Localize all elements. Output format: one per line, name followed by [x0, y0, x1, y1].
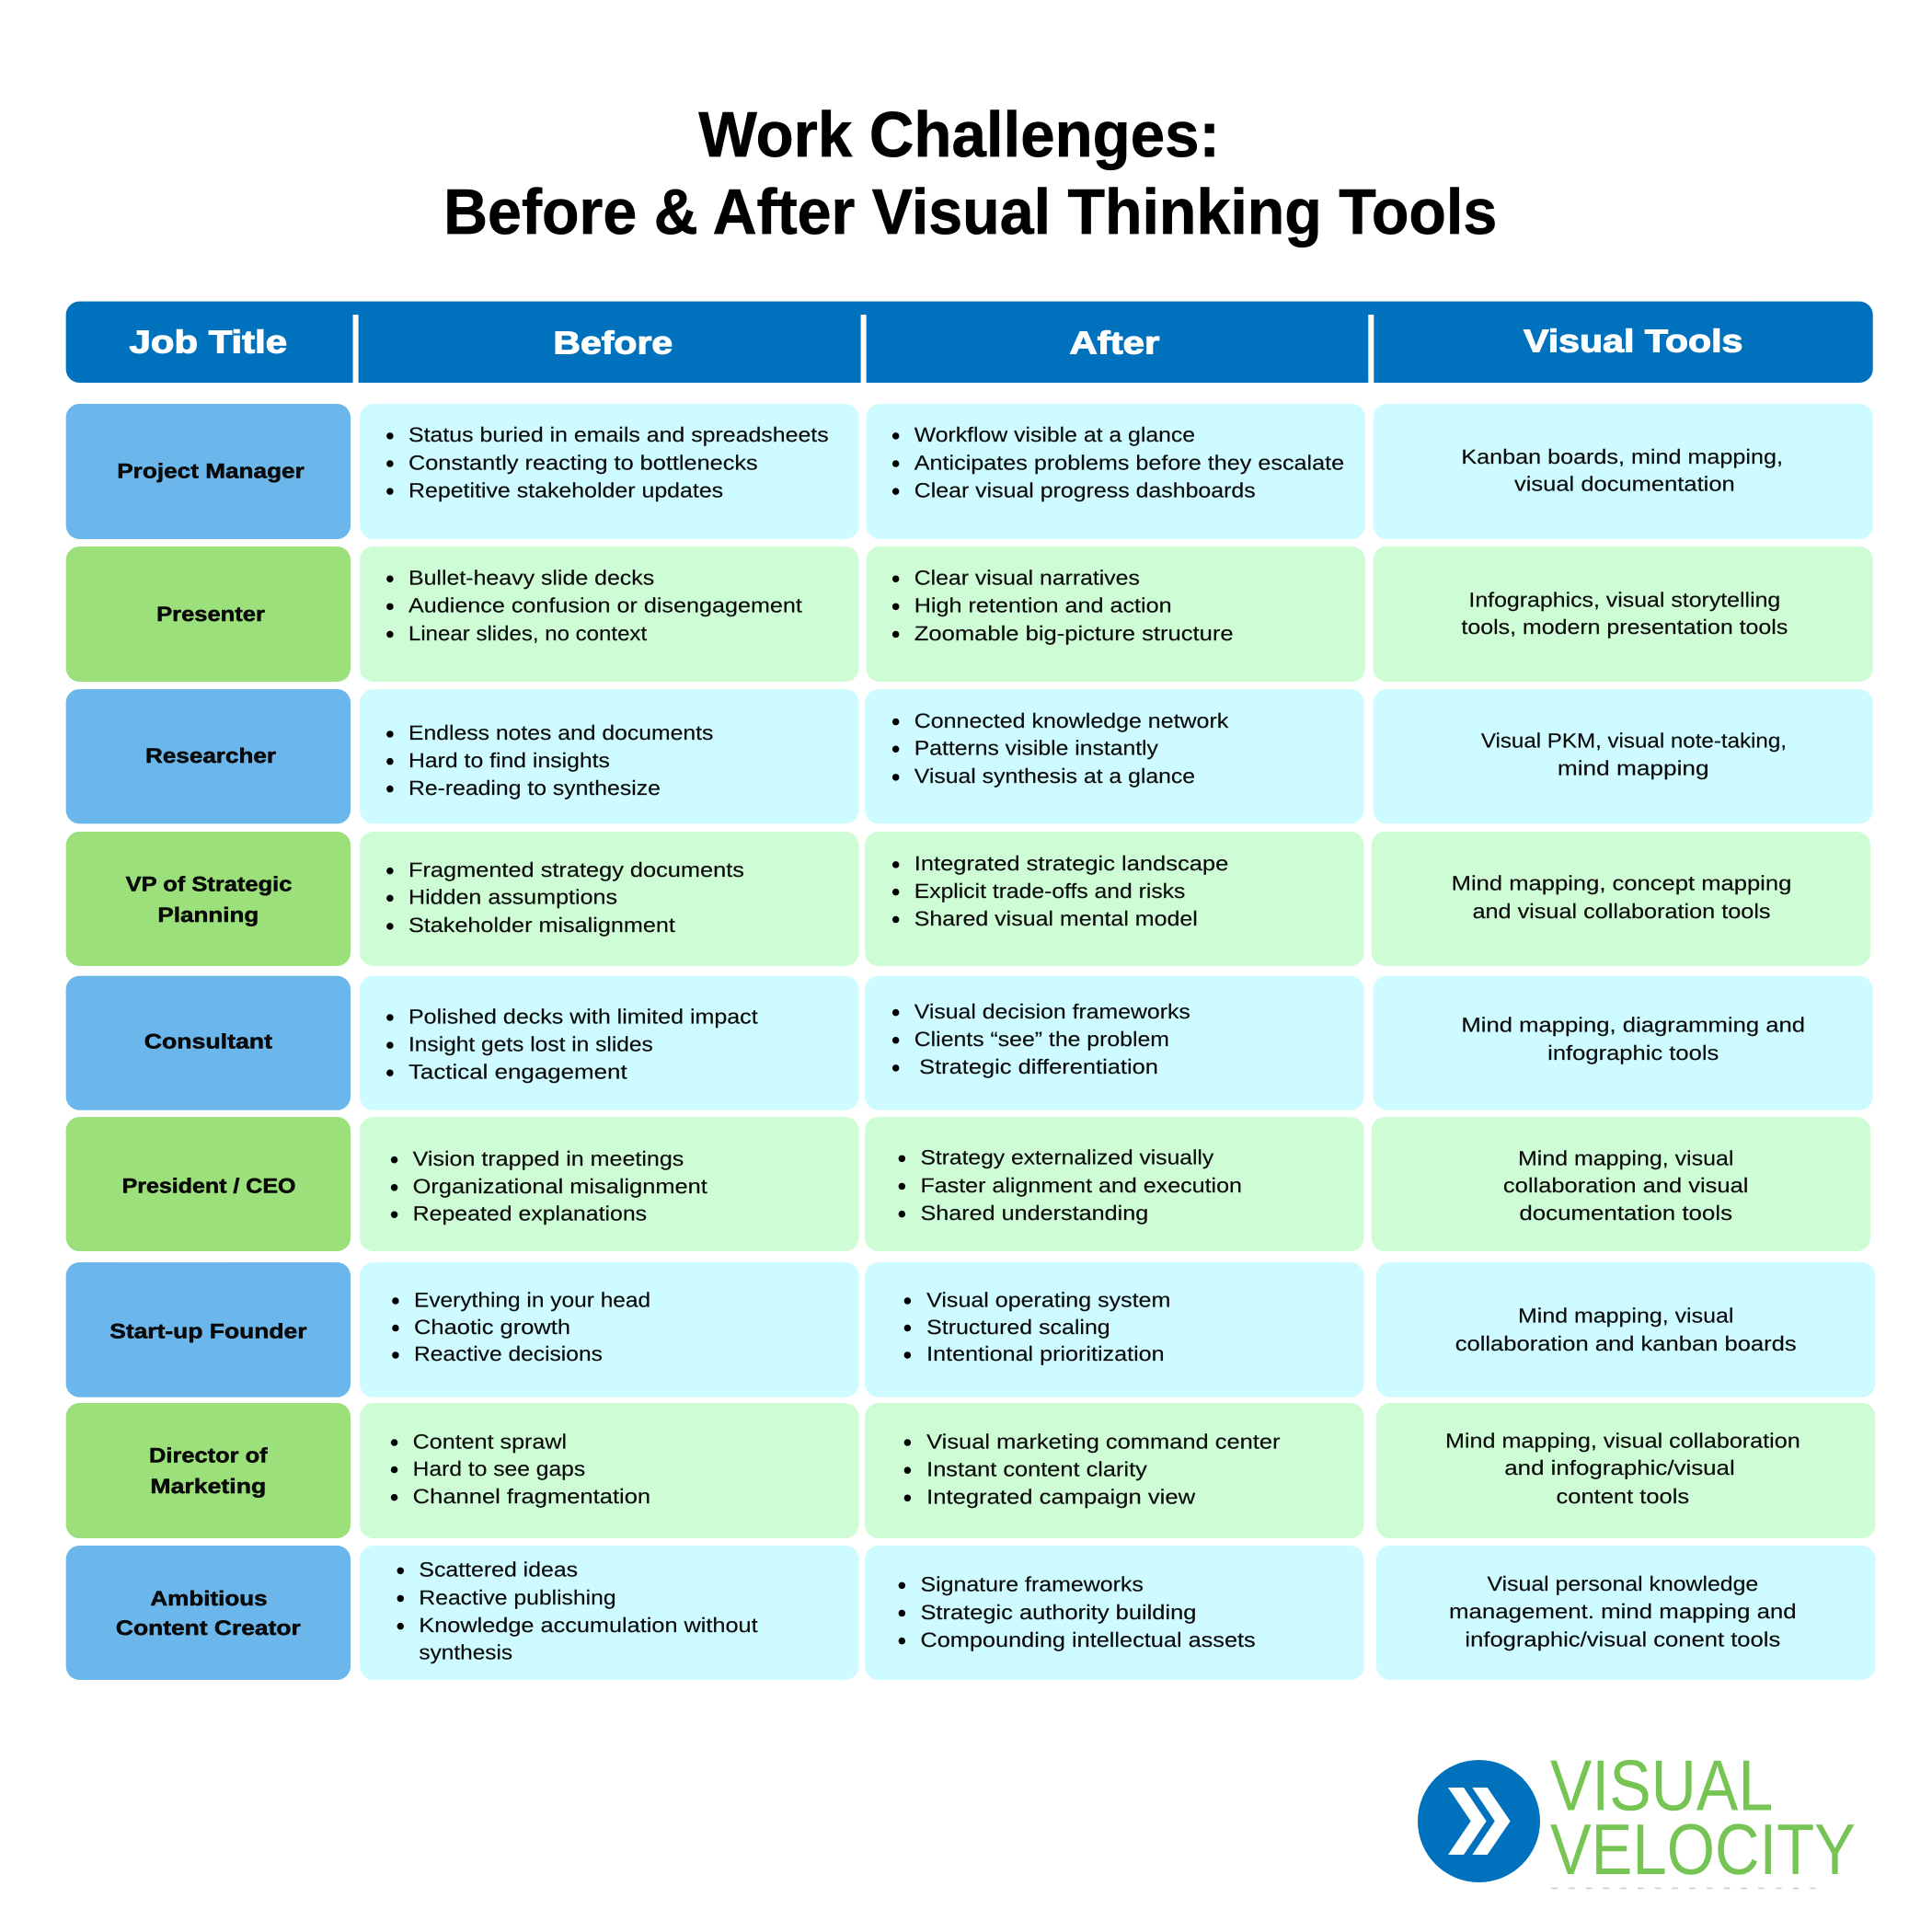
- after: Start-up Founder: Structured scaling: [926, 1316, 1110, 1339]
- tools: Researcher: [1374, 689, 1873, 823]
- after: Ambitious Content Creator: Strategic authority building: [920, 1601, 1196, 1624]
- job title: Consultant: Consultant: [144, 1030, 273, 1053]
- row: Ambitious Content Creator: [66, 1546, 1875, 1680]
- after: Presenter: High retention and action: [914, 594, 1172, 617]
- logo: Visual Velocity: [1418, 1746, 1856, 1890]
- row: Presenter: [66, 546, 1873, 682]
- title: Work Challenges:: [698, 99, 1220, 171]
- after: Presenter: [867, 546, 1365, 682]
- job title: Project Manager: [66, 404, 351, 539]
- tools: Consultant: infographic tools: [1547, 1041, 1719, 1064]
- table header: Visual Tools: [1524, 322, 1742, 359]
- logo wordmark: VELOCITY: [1550, 1810, 1856, 1890]
- before: Ambitious Content Creator: Scattered ideas: [419, 1558, 578, 1581]
- tools: President / CEO: documentation tools: [1519, 1202, 1732, 1225]
- tools: President / CEO: collaboration and visual: [1503, 1174, 1748, 1197]
- tools: VP of Strategic Planning: and visual collaboration tools: [1472, 900, 1771, 923]
- job title: Project Manager: Project Manager: [117, 460, 305, 483]
- before: President / CEO: [360, 1117, 858, 1251]
- before: Start-up Founder: [360, 1262, 858, 1397]
- job title: Researcher: Researcher: [145, 744, 277, 767]
- after: President / CEO: Shared understanding: [920, 1202, 1148, 1225]
- row: Consultant: [66, 976, 1873, 1110]
- before: Director of Marketing: [360, 1403, 858, 1538]
- tools: Ambitious Content Creator: Visual personal knowledge: [1488, 1572, 1758, 1595]
- job title: Presenter: [66, 546, 351, 682]
- after: Project Manager: Workflow visible at a glance: [914, 423, 1195, 446]
- tools: Ambitious Content Creator: management. mind mapping and: [1449, 1600, 1797, 1624]
- tools: Start-up Founder: Mind mapping, visual: [1518, 1305, 1733, 1328]
- after: Start-up Founder: Intentional prioritization: [926, 1342, 1165, 1366]
- table header: Job Title: [130, 324, 287, 361]
- tools: Director of Marketing: Mind mapping, visual collaboration: [1445, 1430, 1800, 1453]
- logo wordmark: [1550, 1746, 1856, 1890]
- after: VP of Strategic Planning: [865, 832, 1364, 966]
- before: Consultant: Tactical engagement: [408, 1060, 627, 1084]
- title: [443, 99, 1497, 248]
- before: Director of Marketing: Hard to see gaps: [413, 1457, 585, 1480]
- before: Presenter: [360, 546, 858, 682]
- job title: Start-up Founder: Start-up Founder: [109, 1319, 307, 1343]
- before: Researcher: [360, 689, 858, 823]
- before: Researcher: Endless notes and documents: [408, 721, 713, 745]
- after: Researcher: Connected knowledge network: [914, 709, 1229, 732]
- tools: VP of Strategic Planning: Mind mapping, concept mapping: [1452, 872, 1791, 895]
- tools: Presenter: tools, modern presentation tools: [1461, 615, 1788, 638]
- tools: Project Manager: [1374, 404, 1873, 539]
- tools: Director of Marketing: content tools: [1557, 1485, 1689, 1508]
- job title: VP of Strategic Planning: [66, 832, 351, 966]
- before: Researcher: Re-reading to synthesize: [408, 776, 661, 799]
- after: Director of Marketing: Instant content clarity: [926, 1457, 1148, 1481]
- after: Project Manager: [867, 404, 1365, 539]
- icon: double chevron circle: [1418, 1760, 1540, 1882]
- before: Consultant: Polished decks with limited impact: [408, 1005, 758, 1029]
- table header: After: [1069, 324, 1159, 361]
- before: Ambitious Content Creator: synthesis: [419, 1640, 512, 1664]
- table header: [66, 302, 1873, 383]
- after: Consultant: Clients “see” the problem: [914, 1028, 1169, 1051]
- before: Start-up Founder: Reactive decisions: [414, 1342, 603, 1366]
- tools: Ambitious Content Creator: [1376, 1546, 1875, 1680]
- after: Presenter: Zoomable big-picture structure: [914, 622, 1234, 645]
- after: VP of Strategic Planning: Integrated strategic landscape: [914, 852, 1228, 876]
- after: Project Manager: Anticipates problems before they escalate: [914, 451, 1344, 475]
- before: Ambitious Content Creator: [360, 1546, 858, 1680]
- tools: President / CEO: [1372, 1117, 1870, 1251]
- tools: Start-up Founder: collaboration and kanban boards: [1455, 1332, 1797, 1355]
- before: VP of Strategic Planning: Stakeholder misalignment: [408, 914, 676, 937]
- before: Start-up Founder: Everything in your head: [414, 1288, 650, 1312]
- job title: VP of Strategic Planning: VP of Strategic: [126, 872, 292, 896]
- job title: Director of Marketing: Director of: [149, 1444, 268, 1467]
- before: Director of Marketing: Content sprawl: [413, 1430, 567, 1454]
- title: Before & After Visual Thinking Tools: [443, 177, 1497, 248]
- tools: President / CEO: Mind mapping, visual: [1518, 1146, 1733, 1170]
- after: President / CEO: [865, 1117, 1364, 1251]
- after: Director of Marketing: Integrated campaign view: [926, 1486, 1197, 1509]
- before: Ambitious Content Creator: Knowledge accumulation without: [419, 1614, 758, 1637]
- tools: VP of Strategic Planning: [1372, 832, 1870, 966]
- before: Presenter: Bullet-heavy slide decks: [408, 566, 654, 590]
- job title: President / CEO: [66, 1117, 351, 1251]
- before: Consultant: [360, 976, 858, 1110]
- job title: Director of Marketing: [66, 1403, 351, 1538]
- before: Director of Marketing: Channel fragmentation: [413, 1485, 650, 1508]
- after: Director of Marketing: Visual marketing command center: [926, 1430, 1281, 1454]
- tools: Presenter: [1374, 546, 1873, 682]
- after: Ambitious Content Creator: [865, 1546, 1364, 1680]
- job title: Ambitious Content Creator: Ambitious: [150, 1587, 268, 1610]
- after: President / CEO: Strategy externalized visually: [920, 1146, 1214, 1169]
- table header: Before: [553, 324, 673, 361]
- after: VP of Strategic Planning: Explicit trade-offs and risks: [914, 880, 1185, 903]
- after: Researcher: Patterns visible instantly: [914, 736, 1159, 760]
- after: Consultant: [865, 976, 1364, 1110]
- before: Project Manager: [360, 404, 858, 539]
- job title: President / CEO: President / CEO: [122, 1174, 295, 1198]
- after: President / CEO: Faster alignment and execution: [920, 1174, 1242, 1197]
- before: VP of Strategic Planning: Hidden assumptions: [408, 886, 617, 909]
- before: Consultant: Insight gets lost in slides: [408, 1032, 653, 1056]
- before: President / CEO: Vision trapped in meetings: [413, 1147, 684, 1170]
- before: Project Manager: Status buried in emails and spreadsheets: [408, 423, 829, 446]
- job title: Ambitious Content Creator: Content Creator: [116, 1616, 302, 1640]
- logo wordmark: VISUAL: [1550, 1746, 1773, 1826]
- job title: Presenter: Presenter: [156, 603, 266, 626]
- job title: Researcher: [66, 689, 351, 823]
- tools: Consultant: [1374, 976, 1873, 1110]
- after: Ambitious Content Creator: Signature frameworks: [920, 1573, 1144, 1596]
- before: Ambitious Content Creator: Reactive publishing: [419, 1586, 616, 1609]
- before: Project Manager: Repetitive stakeholder updates: [408, 478, 723, 502]
- row: Director of Marketing: [66, 1403, 1875, 1538]
- job title: Consultant: [66, 976, 351, 1110]
- tools: Director of Marketing: [1376, 1403, 1875, 1538]
- after: Researcher: Visual synthesis at a glance: [914, 765, 1195, 788]
- row: Researcher: [66, 689, 1873, 823]
- after: VP of Strategic Planning: Shared visual mental model: [914, 907, 1198, 930]
- tools: Presenter: Infographics, visual storytelling: [1468, 589, 1780, 612]
- tools: Ambitious Content Creator: infographic/visual conent tools: [1465, 1627, 1780, 1651]
- tools: Researcher: mind mapping: [1558, 756, 1709, 780]
- row: Start-up Founder: [66, 1262, 1875, 1397]
- after: Ambitious Content Creator: Compounding intellectual assets: [920, 1628, 1256, 1651]
- before: VP of Strategic Planning: Fragmented strategy documents: [408, 858, 744, 881]
- before: Presenter: Audience confusion or disengagement: [408, 594, 802, 617]
- row: President / CEO: [66, 1117, 1870, 1251]
- before: Project Manager: Constantly reacting to bottlenecks: [408, 451, 758, 475]
- before: President / CEO: Repeated explanations: [413, 1202, 647, 1225]
- tools: Project Manager: visual documentation: [1514, 473, 1735, 496]
- job title: Start-up Founder: [66, 1262, 351, 1397]
- row: Project Manager: [66, 404, 1873, 539]
- tools: Researcher: Visual PKM, visual note-taking,: [1481, 729, 1787, 753]
- before: Researcher: Hard to find insights: [408, 749, 610, 772]
- tools: Director of Marketing: and infographic/visual: [1504, 1456, 1735, 1479]
- after: Start-up Founder: Visual operating system: [926, 1288, 1170, 1312]
- job title: VP of Strategic Planning: Planning: [157, 903, 259, 926]
- after: Consultant: Visual decision frameworks: [914, 1000, 1190, 1023]
- before: VP of Strategic Planning: [360, 832, 858, 966]
- after: Director of Marketing: [865, 1403, 1364, 1538]
- job title: Ambitious Content Creator: [66, 1546, 351, 1680]
- after: Consultant: Strategic differentiation: [919, 1055, 1158, 1079]
- row: VP of Strategic Planning: [66, 832, 1870, 966]
- tools: Project Manager: Kanban boards, mind mapping,: [1461, 445, 1783, 469]
- after: Start-up Founder: [865, 1262, 1364, 1397]
- after: Researcher: [865, 689, 1364, 823]
- before: President / CEO: Organizational misalignment: [413, 1175, 707, 1198]
- after: Project Manager: Clear visual progress dashboards: [914, 478, 1256, 502]
- before: Presenter: Linear slides, no context: [408, 622, 648, 645]
- job title: Director of Marketing: Marketing: [150, 1475, 266, 1499]
- after: Presenter: Clear visual narratives: [914, 566, 1140, 590]
- tools: Start-up Founder: [1376, 1262, 1875, 1397]
- before: Start-up Founder: Chaotic growth: [414, 1316, 570, 1339]
- tools: Consultant: Mind mapping, diagramming and: [1461, 1014, 1805, 1037]
